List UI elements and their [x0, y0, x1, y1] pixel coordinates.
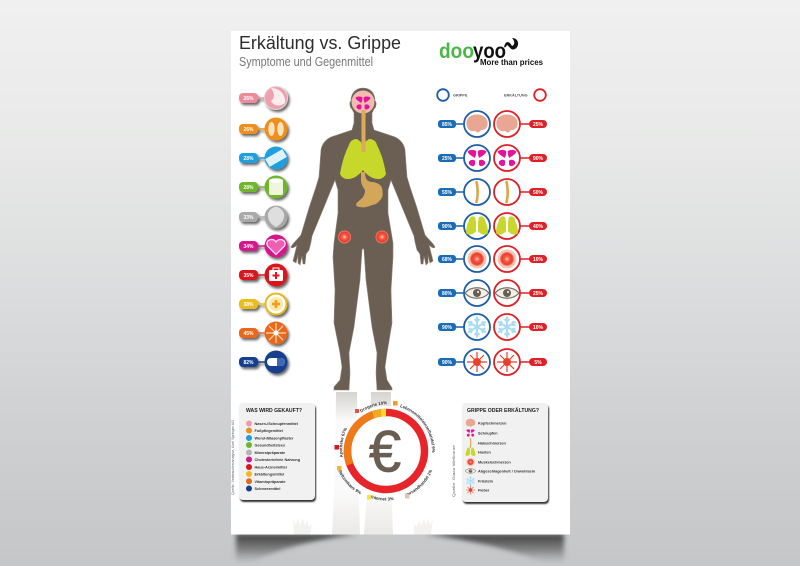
legend: Grippe: GRIPPE	[453, 94, 468, 98]
donut chart	[334, 401, 435, 500]
row: Schnupfen: 90%	[533, 156, 544, 162]
row: Schnupfen	[438, 145, 547, 171]
item: plaster 28%: 28%	[243, 156, 254, 162]
symptom legend: Muskelschmerzen	[478, 460, 511, 464]
item: first aid 35%: 35%	[243, 273, 254, 279]
symptom/remedy column left	[239, 86, 288, 374]
item: yellow plus 38%	[239, 294, 286, 314]
symptom legend: Schnupfen	[478, 432, 498, 436]
poster shadow	[236, 534, 564, 563]
item: pill 82%	[239, 350, 288, 374]
row: Abgeschlagenheit: 25%	[533, 291, 544, 297]
row: Muskelschmerzen: 68%	[442, 257, 453, 263]
symptom legend	[465, 419, 536, 494]
legend list: Schmerzmittel	[254, 487, 280, 491]
item: feet 26%: 26%	[243, 127, 254, 133]
ring labels: Reformhaus 9%	[338, 470, 361, 494]
legend list: Erkältungsmittel	[254, 472, 284, 476]
ring labels: Drogerie 10%	[360, 401, 387, 412]
row: Frösteln: 10%	[533, 325, 544, 331]
row: Husten: 40%	[533, 224, 544, 230]
sinuses	[355, 97, 371, 110]
panel: grippe oder erkältung	[462, 403, 548, 502]
title: Erkältung vs. Grippe	[239, 32, 401, 53]
foot and hand reflections	[293, 392, 433, 534]
row: Halsschmerzen: 55%	[442, 190, 453, 196]
legend list: Haus-Arzneimittel	[254, 466, 287, 470]
row: Fieber: 90%	[442, 360, 453, 366]
symptom comparison rows	[438, 111, 547, 375]
legend: Grippe	[437, 89, 468, 101]
symptom legend: Kopfschmerzen	[478, 422, 507, 426]
row: Muskelschmerzen	[438, 246, 547, 272]
legend list	[246, 420, 301, 492]
row: Kopfschmerzen: 85%	[442, 122, 453, 128]
legend list: Mineralpräparate	[254, 451, 285, 455]
item: muscle 33%: 33%	[243, 215, 254, 221]
euro symbol: €	[369, 420, 401, 484]
ring markers	[334, 401, 410, 500]
symptom legend: Fieber	[478, 488, 490, 492]
face	[352, 90, 374, 114]
row: Kopfschmerzen: 25%	[533, 122, 544, 128]
item: toilet roll 28%	[239, 176, 288, 198]
item: orange slice 45%	[239, 322, 288, 344]
legend list: Wund-/Blasenpflaster	[254, 436, 294, 440]
panel heading: WAS WIRD GEKAUFT?	[246, 408, 302, 414]
item: toilet roll 28%: 28%	[243, 185, 254, 191]
windpipe	[362, 110, 366, 152]
row: Kopfschmerzen	[438, 111, 547, 137]
dooyoo logo: doo	[439, 40, 474, 63]
item: muscle 33%	[239, 206, 288, 228]
human body	[291, 88, 435, 390]
ring labels	[338, 401, 435, 500]
item: heart 34%: 34%	[243, 244, 254, 250]
item: orange slice 45%: 45%	[243, 331, 254, 337]
poster sheet	[231, 31, 570, 534]
row: Husten: 90%	[442, 224, 453, 230]
item: first aid 35%	[239, 264, 288, 286]
row: Fieber	[438, 349, 547, 375]
dooyoo logo: More than prices	[480, 58, 544, 67]
row: Muskelschmerzen: 10%	[533, 257, 544, 263]
dooyoo logo: yoo	[473, 40, 506, 63]
ring labels: Lebensmitteleinzelhandel 9%	[400, 404, 435, 452]
legend list: Cholesterinfreie Nahrung	[254, 458, 301, 462]
symptom legend: Frösteln	[478, 480, 494, 484]
panel: was wird gekauft	[239, 403, 315, 500]
item: nose 26%: 26%	[243, 96, 254, 102]
item: yellow plus 38%: 38%	[243, 302, 254, 308]
item: pill 82%: 82%	[243, 360, 254, 366]
item: heart 34%	[239, 234, 288, 258]
item: plaster 28%	[239, 146, 288, 170]
row: Schnupfen: 25%	[442, 156, 453, 162]
legend: Erkältung	[504, 89, 546, 101]
legend list: Nasen-/Schnupfenmittel	[254, 422, 298, 426]
dooyoo logo	[439, 38, 544, 67]
symptom legend: Halsschmerzen	[478, 442, 507, 446]
item: feet 26%	[239, 118, 288, 140]
ring labels: Apotheke 67%	[339, 428, 347, 458]
subtitle: Symptome und Gegenmittel	[239, 55, 373, 69]
source note left: Quelle: Verbraucheranalyse, Axel Springer AG	[231, 420, 235, 495]
legend list: Gesundheitstees	[254, 444, 285, 448]
row: Husten	[438, 213, 547, 239]
row: Abgeschlagenheit: 80%	[442, 291, 453, 297]
row: Abgeschlagenheit	[438, 280, 547, 306]
stomach	[356, 172, 383, 207]
legend list: Fußpflegemittel	[254, 429, 283, 433]
symptom legend: Husten	[478, 450, 492, 454]
knee pain left	[338, 230, 351, 244]
panel heading: GRIPPE ODER ERKÄLTUNG?	[467, 407, 539, 414]
item: nose 26%	[239, 86, 288, 110]
legend: Erkältung: ERKÄLTUNG	[504, 94, 528, 98]
row: Frösteln	[438, 314, 547, 340]
row: Halsschmerzen	[438, 179, 547, 205]
source note right: Quelle: Glaxo Wellcome	[452, 445, 456, 497]
ring track	[348, 412, 424, 490]
white disc	[341, 406, 431, 496]
ring labels: Versandhandel 1%	[404, 470, 432, 495]
row: Fieber: 5%	[534, 360, 542, 366]
legend list: Vitaminpräparate	[254, 480, 285, 484]
ring labels: Internet 3%	[372, 495, 394, 500]
lungs	[340, 139, 386, 179]
row: Halsschmerzen: 50%	[533, 190, 544, 196]
knee pain right	[376, 230, 388, 244]
row: Frösteln: 90%	[442, 325, 453, 331]
symptom legend: Abgeschlagenheit / Unwohlsein	[478, 470, 536, 474]
